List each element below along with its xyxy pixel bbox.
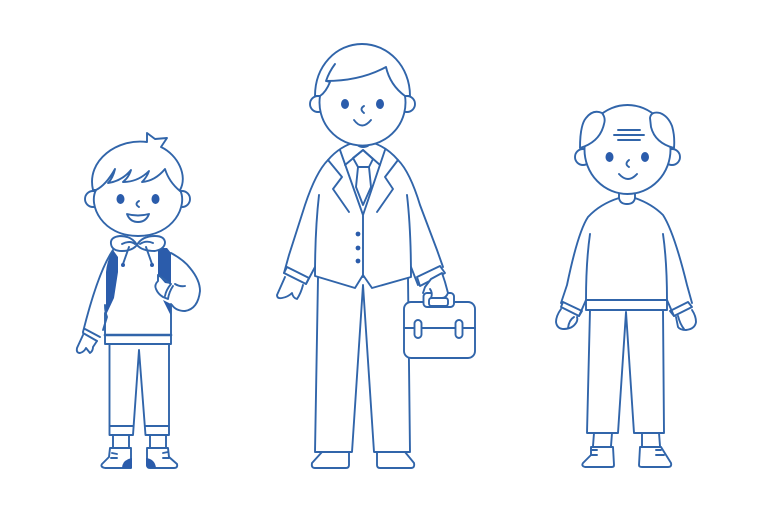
elderly man left hair [580,112,605,148]
boy mouth [127,214,149,222]
briefcase [404,293,475,358]
man nose [362,106,364,113]
man mouth [354,120,371,126]
elderly man head [584,105,670,194]
boy hem [105,335,171,344]
man left cuff [284,267,309,284]
man shirt collar and tie [345,150,380,205]
man jacket [284,142,443,288]
elderly man right hair [650,113,674,148]
boy ears [85,191,190,207]
elderly man right hand [676,310,696,330]
elderly man right shoe [639,447,671,467]
boy left shoe [101,448,132,468]
figure: elderly man [556,105,696,467]
boy eyes [116,194,160,204]
man right cuff [417,266,445,286]
boy drawstrings [121,247,154,267]
elderly man left cuff [561,302,582,316]
man eyes [341,99,384,109]
elderly man left hand [556,309,577,329]
boy fringe [96,169,180,191]
boy nose [136,201,139,207]
elderly man hem [586,300,667,310]
elderly man right cuff [670,302,692,316]
elderly man neck [619,194,635,204]
figure: boy [77,133,200,468]
elderly man left shoe [582,447,614,467]
boy arm crease [175,284,185,286]
elderly man forehead wrinkles [614,130,644,140]
figure: man in suit [277,44,475,468]
boy fist [155,275,173,299]
boy head [92,133,183,236]
elderly man mouth [619,174,637,179]
boy backpack straps [106,248,171,316]
elderly man nose [626,160,629,167]
man head [315,44,410,146]
elderly man ears [575,149,680,165]
boy shins [113,435,166,448]
man right hand [423,273,448,298]
man trousers [315,278,410,452]
man buttons [356,232,360,263]
man neck [356,141,370,147]
elderly man sweater [561,198,692,316]
boy trousers [110,344,169,435]
man hair [320,64,405,96]
boy torso and sleeves [77,250,200,353]
man shoes [312,452,414,468]
man ears [310,96,415,112]
elderly man shins [593,433,660,446]
boy hood [111,236,165,251]
boy right shoe [146,448,177,468]
elderly man eyes [606,152,649,162]
man left hand [277,277,303,299]
elderly man trousers [587,310,664,433]
